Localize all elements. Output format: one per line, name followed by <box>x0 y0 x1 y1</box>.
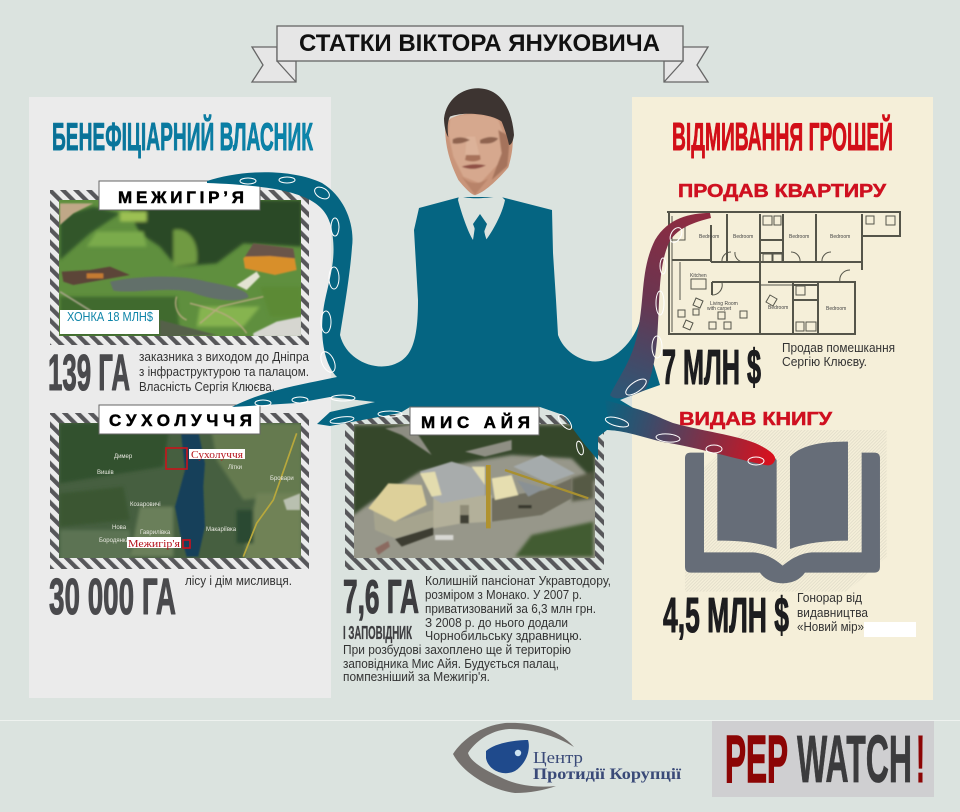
text: Cape Aya description: З 2008 р. до нього додали <box>425 615 568 630</box>
figure: 7 million dollars: 7 МЛН $ <box>662 341 761 395</box>
subheading: published book: ВИДАВ КНИГУ <box>679 409 833 429</box>
card: Mezhyhirya <box>50 181 309 345</box>
text: Cape Aya description: Колишній пансіонат Укравтодору, <box>425 573 611 588</box>
text: apartment sale <box>782 340 895 369</box>
figure caption: and reserve: І ЗАПОВІДНИК <box>343 623 413 643</box>
text: book fee: Гонорар від <box>797 590 862 605</box>
text: Cape Aya description: При розбудові захоплено ще й територію <box>343 642 571 657</box>
logo: PEP Watch <box>712 721 934 797</box>
label: Cape Aya: МИС АЙЯ <box>421 413 530 432</box>
octopus figure: suit with tentacles <box>207 172 775 465</box>
text: book fee: видавництва <box>797 605 869 620</box>
text: Cape Aya description: Чорнобильську здравницю. <box>425 628 582 643</box>
map town names: Макаріївка <box>206 527 237 533</box>
icon: open book <box>685 430 887 592</box>
text: Mezhyhirya description: Власність Сергія Клюєва. <box>139 379 275 394</box>
floor plan room labels: Bedroom <box>830 234 850 240</box>
subheading: sold apartment: ПРОДАВ КВАРТИРУ <box>678 181 887 201</box>
logo text <box>533 748 682 783</box>
map town names: Нова <box>112 525 127 531</box>
logo text: Центр <box>533 748 583 767</box>
map town names: Бородянка <box>99 538 130 544</box>
panel: money laundering <box>632 97 933 700</box>
card: Sukholuchchia <box>50 405 309 569</box>
furniture <box>678 216 895 331</box>
tentacle: apartment <box>610 213 711 398</box>
tentacle: book <box>605 400 775 465</box>
map marker: Sukholuchchia: Сухолуччя <box>191 449 243 461</box>
text: Mezhyhirya description <box>139 349 310 394</box>
logo: PEP Watch: ! <box>916 722 925 797</box>
floor plan room labels: with carpet <box>707 306 732 312</box>
text: Sukholuchchia description: лісу і дім мисливця. <box>185 573 292 588</box>
map town names: Димер <box>114 454 133 460</box>
face <box>445 113 513 195</box>
map marker: Sukholuchchia <box>166 448 245 469</box>
hair <box>444 88 514 145</box>
portrait: head <box>444 88 514 195</box>
text: Cape Aya description: розміром з Монако. У 2007 р. <box>425 587 582 602</box>
title ribbon <box>252 26 708 82</box>
title: СТАТКИ ВІКТОРА ЯНУКОВИЧА <box>299 30 660 57</box>
text: Mezhyhirya description: з інфраструктурою та палацом. <box>139 364 309 379</box>
text: Cape Aya description: заповідника Мис Айя. Будується палац, <box>343 656 559 671</box>
text: apartment sale: Продав помешкання <box>782 340 895 355</box>
logo eye <box>486 740 529 773</box>
map town names <box>97 454 294 544</box>
floor plan room labels <box>690 234 850 312</box>
floor plan <box>667 212 900 334</box>
map town names: Літки <box>228 465 242 471</box>
label: Sukholuchchia <box>99 405 260 434</box>
floor plan room labels: Bedroom <box>826 306 846 312</box>
text: apartment sale: Сергію Клюєву. <box>782 354 867 369</box>
suckers <box>240 177 764 465</box>
text: book fee <box>797 590 869 634</box>
shirt collar <box>458 196 505 240</box>
floor plan room labels: Bedroom <box>768 305 788 311</box>
white label box: house price: ХОНКА 18 МЛН$ <box>67 309 154 324</box>
label: Cape Aya <box>410 407 539 435</box>
text: Cape Aya description: помпезніший за Межигір'я. <box>343 669 490 684</box>
photo: Mezhyhirya aerial <box>59 200 302 337</box>
floor plan room labels: Bedroom <box>699 234 719 240</box>
text: Mezhyhirya description: заказника з виходом до Дніпра <box>139 349 310 364</box>
map town names: Гаврилівка <box>140 530 171 536</box>
logo text: Протидії Корупції <box>533 766 682 783</box>
figure: 4.5 million dollars: 4,5 МЛН $ <box>663 589 789 643</box>
label: Sukholuchchia: СУХОЛУЧЧЯ <box>109 411 252 430</box>
map town names: Вишів <box>97 470 114 476</box>
text: БЕНЕФІЦІАРНИЙ ВЛАСНИК <box>52 114 313 159</box>
figure: 30 000 ha: 30 000 ГА <box>49 568 176 625</box>
stripe frame <box>345 415 604 570</box>
logo: PEP Watch: PEP <box>725 722 788 797</box>
photo: Cape Aya palace under construction <box>353 424 595 558</box>
text: Cape Aya description <box>343 573 611 684</box>
figure: 139 ha: 139 ГА <box>48 344 130 401</box>
stripe frame <box>50 190 309 345</box>
label: Mezhyhirya: МЕЖИГІР’Я <box>118 188 244 207</box>
tie <box>473 214 487 241</box>
white label box: house price <box>60 309 159 334</box>
floor plan room labels: Living Room <box>710 301 738 307</box>
map town names: Козаровичі <box>130 502 161 508</box>
floor plan room labels: Bedroom <box>733 234 753 240</box>
text: book fee: «Новий мір» <box>797 619 864 634</box>
label: Mezhyhirya <box>99 181 260 210</box>
floor plan room labels: Kitchen <box>690 273 707 279</box>
logo: Anti-Corruption Centre <box>453 723 682 793</box>
panel: beneficial owner <box>29 97 331 698</box>
map town names: Бровари <box>270 476 294 482</box>
figure: 7.6 ha: 7,6 ГА <box>343 570 419 623</box>
text: Cape Aya description: приватизований за 6,3 млн грн. <box>425 601 596 616</box>
octopus body <box>207 172 660 460</box>
card: Cape Aya <box>345 415 604 570</box>
stripe frame <box>50 413 309 569</box>
map: Kyiv reservoir satellite <box>59 423 302 560</box>
floor plan room labels: Bedroom <box>789 234 809 240</box>
logo swoosh <box>453 723 574 793</box>
map marker: Mezhyhirya: Межигір'я <box>128 538 180 550</box>
